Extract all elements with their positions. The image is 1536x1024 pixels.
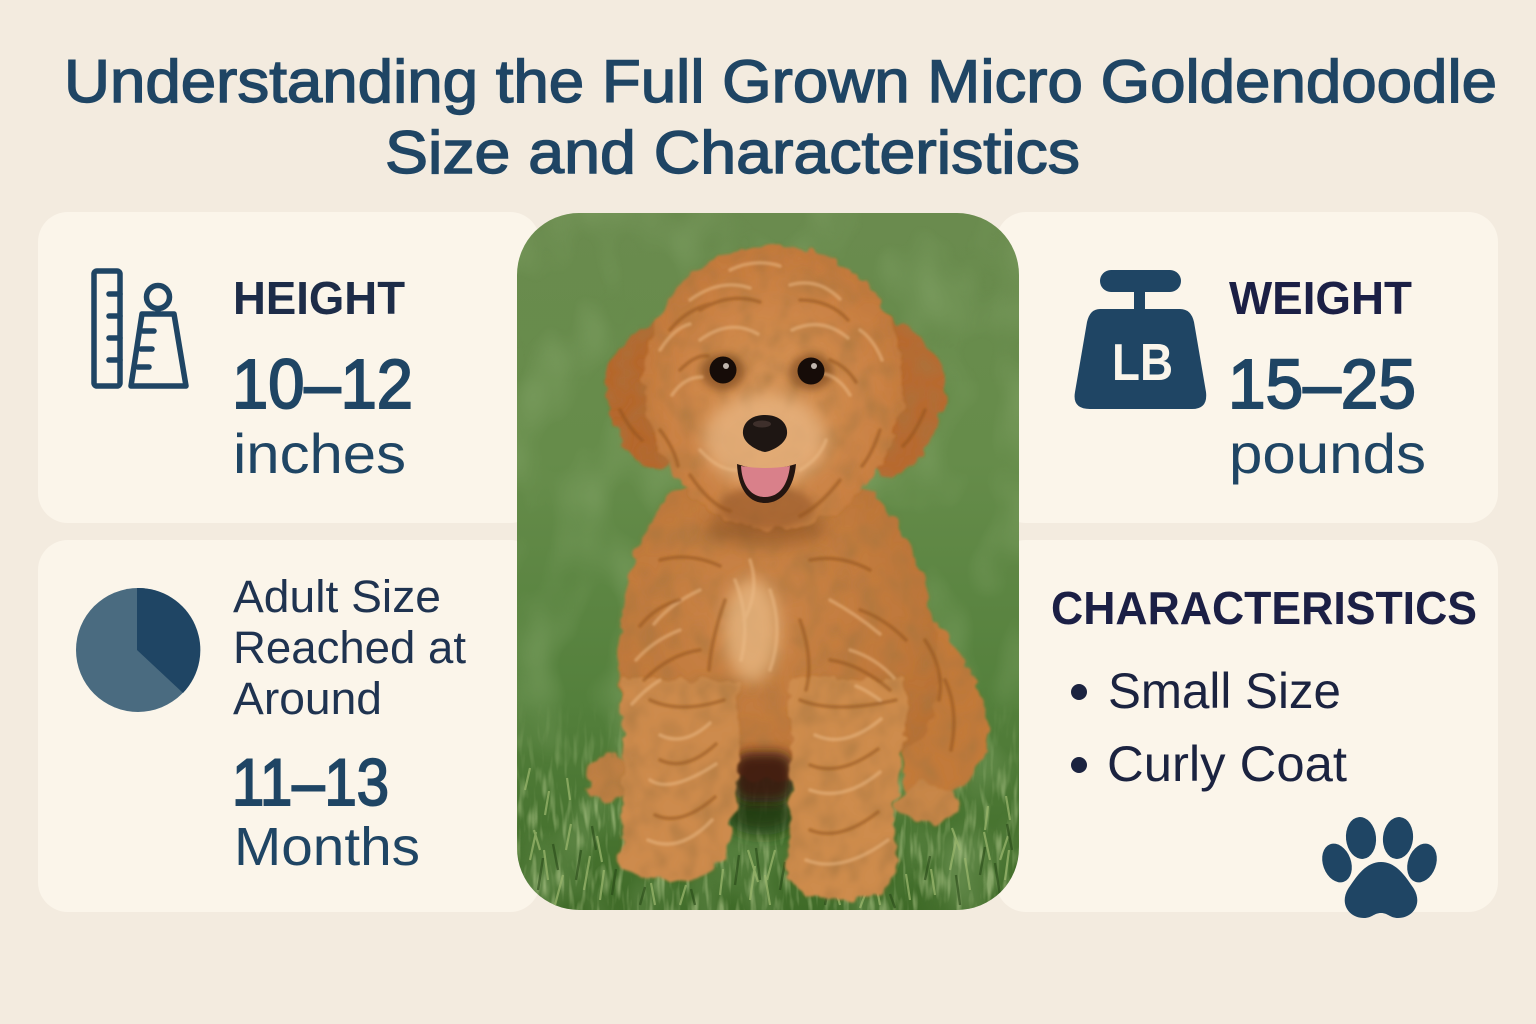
panel: weight [996, 212, 1498, 523]
title: Understanding the Full Grown Micro Goldendoodle [64, 48, 1497, 115]
puppy body [586, 490, 987, 900]
puppy mouth and tongue [737, 464, 796, 503]
panel: adult size [38, 540, 540, 912]
puppy head [645, 246, 903, 530]
panel: height [38, 212, 540, 523]
value: weight: 15–25 [1228, 345, 1416, 423]
icon: LB weight: LB [1112, 334, 1173, 392]
title [64, 48, 1497, 186]
puppy ears [604, 316, 946, 477]
icon: paw print [1317, 816, 1442, 918]
text: adult size reached: Adult Size [233, 571, 441, 622]
unit: pounds: pounds [1229, 422, 1426, 485]
heading: weight: WEIGHT [1229, 272, 1412, 324]
title: Size and Characteristics [385, 119, 1080, 186]
infographic canvas [38, 58, 1498, 918]
list: characteristics [1071, 663, 1347, 792]
icon: ruler and weight [94, 271, 186, 386]
heading: height: HEIGHT [233, 272, 405, 324]
unit: months: Months [234, 817, 420, 877]
panel: characteristics [996, 540, 1498, 918]
puppy nose [743, 415, 787, 452]
text: adult size reached: Around [233, 673, 382, 724]
grass background [517, 213, 1019, 910]
fur tufts [620, 263, 954, 864]
icon: pie chart [76, 588, 200, 712]
text: adult size reached [233, 571, 466, 724]
value: months: 11–13 [232, 745, 389, 819]
unit: inches: inches [233, 422, 406, 485]
shadow under puppy [726, 795, 798, 835]
heading: characteristics: CHARACTERISTICS [1051, 582, 1477, 634]
icon: LB weight [1075, 270, 1206, 409]
text: adult size reached: Reached at [233, 622, 466, 673]
list: characteristics: Curly Coat [1107, 736, 1347, 792]
list: characteristics: Small Size [1108, 663, 1341, 719]
value: height: 10–12 [232, 345, 413, 423]
photo: puppy on grass [517, 213, 1019, 910]
puppy eyes [710, 356, 824, 384]
